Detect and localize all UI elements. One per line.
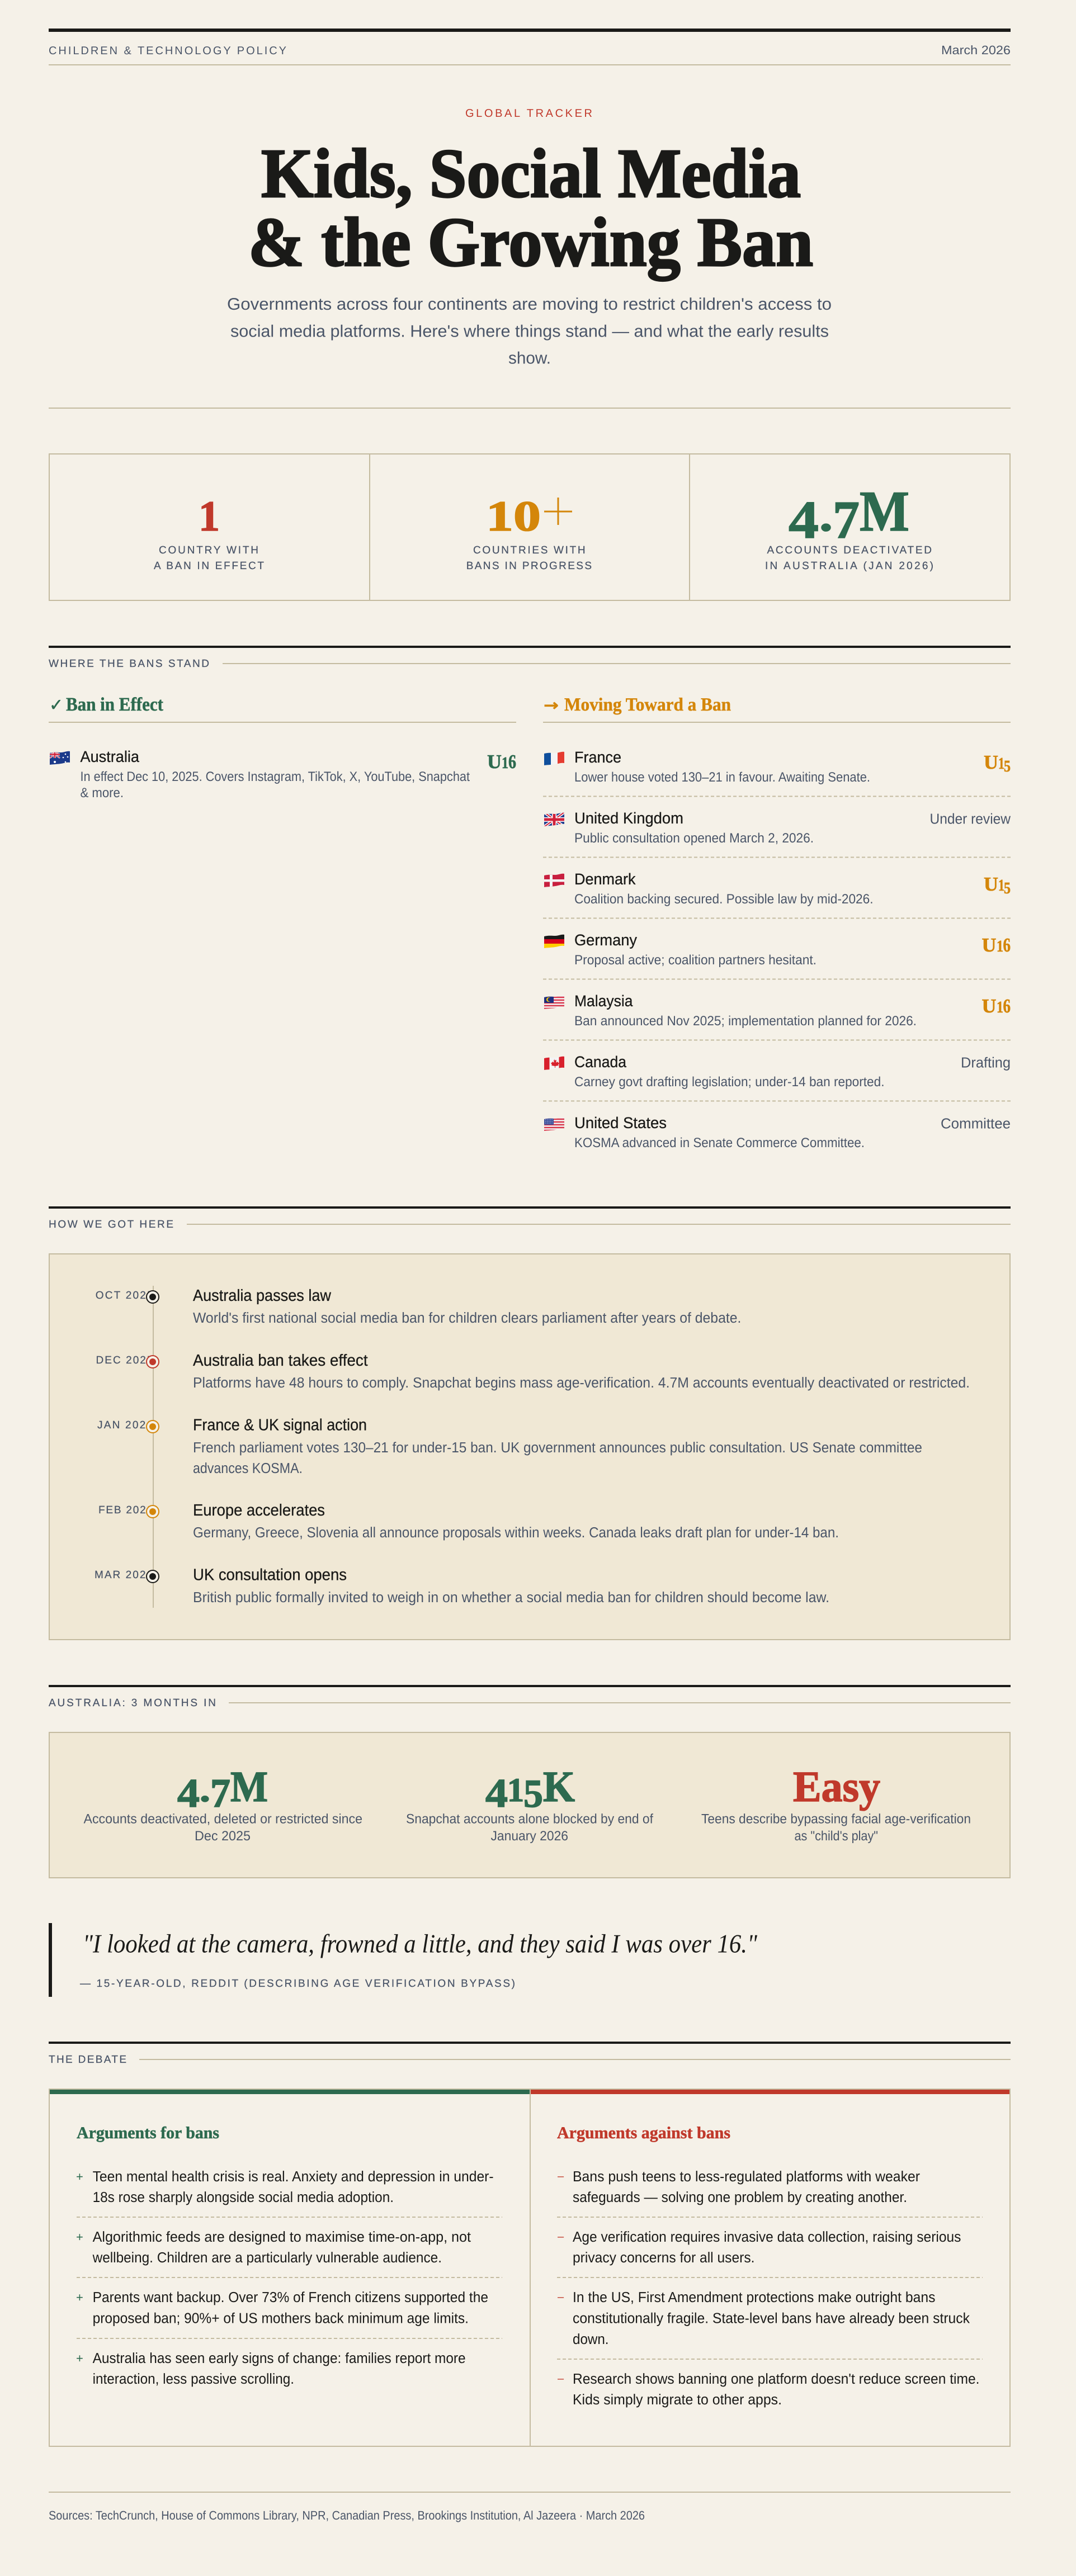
- argument 3: +: [76, 2290, 83, 2304]
- heading: arguments for: Arguments for bans: [77, 2124, 219, 2142]
- event: Oct 2025: World's first national social media ban for children clears parliament after years of debate.: [193, 1309, 741, 1326]
- column: arguments against bans: [531, 2090, 1009, 2408]
- row: France: [544, 751, 1010, 784]
- stat: 4.7M accounts: 4: [789, 490, 819, 550]
- event: Feb 2026: Germany, Greece, Slovenia all announce proposals within weeks. Canada leaks draft plan for under-14 ban.: [193, 1524, 839, 1541]
- row: United States: KOSMA advanced in Senate Commerce Committee.: [574, 1135, 865, 1150]
- title: Kids, Social Media: [261, 135, 801, 212]
- icon: Canada flag: [544, 1056, 564, 1071]
- row: Germany: 1: [997, 937, 1003, 955]
- row: Denmark: Denmark: [574, 870, 636, 888]
- event: Dec 2025: Platforms have 48 hours to comply. Snapchat begins mass age-verification. 4.7M accounts eventually deactivated or restricted.: [193, 1374, 970, 1391]
- footer sources: Sources: TechCrunch, House of Commons Library, NPR, Canadian Press, Brookings Institution, Al Jazeera · March 2026: [49, 2508, 645, 2522]
- stat: 4.7M: 4: [177, 1770, 200, 1816]
- row: Canada: Canada: [574, 1053, 626, 1071]
- stat: 4.7M accounts: ACCOUNTS DEACTIVATED: [767, 544, 932, 556]
- stat: 1 country: A BAN IN EFFECT: [154, 560, 264, 572]
- row: Denmark: [544, 870, 1011, 907]
- event: Mar 2026: MAR 2026: [95, 1569, 153, 1581]
- row: Denmark: Coalition backing secured. Possible law by mid-2026.: [574, 892, 874, 907]
- argument 3: [76, 2289, 488, 2327]
- stat: Easy: Easy: [793, 1762, 880, 1811]
- row: Germany: Germany: [574, 931, 637, 949]
- stat: 4.7M: 7: [210, 1770, 230, 1816]
- section heading: Australia 3 months in: AUSTRALIA: 3 MONTHS IN: [49, 1697, 216, 1709]
- stat: Easy: [701, 1762, 971, 1844]
- row: Germany: 6: [1003, 934, 1011, 956]
- row: Denmark: 1: [998, 877, 1004, 894]
- argument 2: Algorithmic feeds are designed to maximise time-on-app, not: [93, 2228, 471, 2245]
- argument 3: In the US, First Amendment protections make outright bans: [573, 2289, 935, 2305]
- panel: headline stats: [49, 454, 1010, 600]
- argument 2: –: [558, 2231, 564, 2243]
- event: Dec 2025: DEC 2025: [96, 1355, 153, 1366]
- argument 1: +: [76, 2170, 83, 2184]
- row: France: France: [574, 749, 621, 766]
- row: France: U: [984, 751, 998, 773]
- stat: 4.7M accounts: M: [860, 480, 909, 543]
- masthead label: CHILDREN & TECHNOLOGY POLICY: [49, 45, 286, 57]
- quote attribution: — 15-YEAR-OLD, REDDIT (DESCRIBING AGE VERIFICATION BYPASS): [80, 1978, 515, 1990]
- row: Australia: In effect Dec 10, 2025. Covers Instagram, TikTok, X, YouTube, Snapchat: [81, 769, 470, 784]
- row: Australia: 6: [508, 751, 516, 773]
- stat: 415K: 4: [485, 1770, 508, 1816]
- argument 4: interaction, less passive scrolling.: [93, 2370, 294, 2387]
- section heading: Australia 3 months in: [49, 1685, 1011, 1709]
- icon: UK flag: [544, 812, 564, 827]
- argument 4: Research shows banning one platform doesn't reduce screen time.: [573, 2370, 980, 2387]
- stat: 1 country: 1: [199, 492, 220, 540]
- event: Jan 2026: French parliament votes 130–21 for under-15 ban. UK government announces public consultation. US Senate committee: [193, 1439, 922, 1456]
- event: Mar 2026: British public formally invited to weigh in on whether a social media ban for children should become law.: [193, 1589, 829, 1606]
- argument 2: [76, 2228, 471, 2266]
- row: France: 5: [1004, 757, 1011, 775]
- pull quote: [49, 1923, 757, 1997]
- event: Dec 2025: Australia ban takes effect: [193, 1352, 368, 1370]
- stat: 415K: K: [543, 1762, 575, 1811]
- row: Malaysia: [544, 992, 1011, 1029]
- stat: 415K: [406, 1762, 653, 1844]
- row: Germany: [544, 931, 1011, 968]
- stat: 4.7M accounts: [765, 480, 933, 572]
- icon: Denmark flag: [544, 873, 564, 888]
- section heading: where the bans stand: WHERE THE BANS STAND: [49, 658, 209, 670]
- row: Malaysia: 6: [1003, 995, 1011, 1017]
- event: Mar 2026: [95, 1566, 829, 1606]
- argument 1: [76, 2168, 494, 2205]
- argument 3: constitutionally fragile. State-level bans have already been struck: [573, 2310, 970, 2327]
- row: United Kingdom: Under review: [929, 811, 1011, 827]
- argument 1: safeguards — solving one problem by creating another.: [573, 2189, 907, 2205]
- section heading: the debate: [49, 2042, 1011, 2066]
- argument 1: [558, 2168, 920, 2205]
- argument 3: –: [558, 2291, 564, 2303]
- row: Australia: U: [487, 751, 502, 773]
- row: United Kingdom: [544, 809, 1011, 846]
- event: Feb 2026: FEB 2026: [98, 1504, 153, 1516]
- hero header: [49, 107, 1011, 409]
- section heading: how we got here: HOW WE GOT HERE: [49, 1219, 173, 1230]
- argument 2: privacy concerns for all users.: [573, 2249, 755, 2266]
- row: Canada: Carney govt drafting legislation; under-14 ban reported.: [574, 1074, 885, 1090]
- masthead date: March 2026: [941, 43, 1011, 57]
- stat: 4.7M: M: [230, 1762, 268, 1811]
- column: arguments for bans: [50, 2090, 530, 2387]
- row: Germany: Proposal active; coalition partners hesitant.: [574, 953, 817, 968]
- row: Denmark: U: [984, 873, 998, 895]
- heading: arguments against: Arguments against bans: [557, 2124, 730, 2142]
- event: Jan 2026: JAN 2026: [97, 1419, 153, 1431]
- panel: Australia stats: [49, 1732, 1010, 1878]
- icon: France flag: [544, 751, 564, 766]
- stat: 1 country: [154, 492, 264, 572]
- argument 3: [558, 2289, 970, 2347]
- icon: Germany flag: [544, 934, 564, 949]
- event: Oct 2025: Australia passes law: [193, 1287, 332, 1305]
- argument 2: wellbeing. Children are a particularly vulnerable audience.: [92, 2249, 442, 2266]
- argument 2: +: [76, 2230, 83, 2244]
- row: Malaysia: Malaysia: [574, 992, 633, 1010]
- row: France: 1: [998, 755, 1004, 773]
- masthead: [49, 29, 1011, 65]
- stat: 415K: 5: [523, 1772, 543, 1816]
- row: Malaysia: 1: [997, 998, 1003, 1016]
- row: Denmark: 5: [1004, 879, 1011, 897]
- stat: 10+ countries: [466, 492, 592, 572]
- event: Feb 2026: Europe accelerates: [193, 1502, 325, 1519]
- stat: 1 country: COUNTRY WITH: [159, 544, 258, 556]
- event: Feb 2026: [98, 1502, 839, 1541]
- quote text: "I looked at the camera, frowned a little, and they said I was over 16.": [83, 1930, 757, 1959]
- argument 2: Age verification requires invasive data collection, raising serious: [573, 2228, 961, 2245]
- argument 4: Australia has seen early signs of change: families report more: [93, 2350, 466, 2366]
- subtitle: [227, 295, 832, 368]
- argument 4: [558, 2370, 980, 2408]
- event: Oct 2025: OCT 2025: [96, 1290, 153, 1301]
- argument 1: –: [558, 2170, 564, 2182]
- argument 4: –: [558, 2373, 564, 2385]
- eyebrow: GLOBAL TRACKER: [465, 107, 592, 120]
- argument 3: proposed ban; 90%+ of US mothers back minimum age limits.: [93, 2310, 469, 2327]
- row: Malaysia: Ban announced Nov 2025; implementation planned for 2026.: [574, 1014, 917, 1029]
- panel: timeline: [49, 1254, 1010, 1640]
- panel: debate: [49, 2089, 1010, 2446]
- icon: Malaysia flag: [544, 995, 564, 1010]
- argument 4: [76, 2350, 466, 2387]
- stat: Easy: as "child's play": [794, 1829, 878, 1844]
- argument 1: Bans push teens to less-regulated platforms with weaker: [573, 2168, 920, 2185]
- row: Australia: Australia: [81, 748, 139, 765]
- stat: 4.7M accounts: IN AUSTRALIA (JAN 2026): [765, 560, 933, 572]
- argument 4: +: [76, 2351, 83, 2365]
- stat: 4.7M: .: [200, 1771, 210, 1809]
- column heading: moving toward a ban: →: [544, 696, 559, 714]
- stat: Easy: Teens describe bypassing facial age-verification: [701, 1811, 971, 1827]
- row: United States: United States: [574, 1114, 667, 1131]
- argument 1: Teen mental health crisis is real. Anxiety and depression in under-: [93, 2168, 494, 2185]
- subtitle: show.: [508, 349, 551, 368]
- row: United States: Committee: [941, 1115, 1011, 1131]
- row: Malaysia: U: [982, 995, 997, 1017]
- row: Canada: [544, 1053, 1011, 1090]
- stat: 415K: January 2026: [491, 1829, 568, 1844]
- column heading: moving toward a ban: Moving Toward a Ban: [564, 695, 731, 715]
- event: Jan 2026: France & UK signal action: [193, 1417, 367, 1434]
- stat: 10+ countries: COUNTRIES WITH: [473, 544, 586, 556]
- stat: 10+ countries: 10: [486, 492, 541, 540]
- column heading: ban in effect: ✓: [49, 695, 63, 715]
- stat: 4.7M: Accounts deactivated, deleted or restricted since: [84, 1811, 362, 1827]
- event: Jan 2026: advances KOSMA.: [193, 1460, 303, 1476]
- row: United States: [544, 1117, 1010, 1147]
- event: Mar 2026: UK consultation opens: [193, 1566, 347, 1584]
- row: Germany: U: [982, 934, 997, 956]
- title: [248, 135, 813, 281]
- argument 1: 18s rose sharply alongside social media adoption.: [93, 2189, 394, 2205]
- event: Jan 2026: [97, 1417, 922, 1476]
- column heading: ban in effect: Ban in Effect: [66, 694, 164, 715]
- row: Australia: & more.: [81, 785, 124, 801]
- row: Australia: 1: [502, 754, 508, 772]
- argument 3: Parents want backup. Over 73% of French citizens supported the: [93, 2289, 488, 2305]
- event: Dec 2025: [96, 1352, 970, 1391]
- event: Oct 2025: [96, 1287, 741, 1326]
- icon: US flag: [544, 1117, 564, 1131]
- argument 4: Kids simply migrate to other apps.: [573, 2391, 782, 2408]
- section heading: where the bans stand: [49, 646, 1011, 670]
- argument 2: [558, 2228, 961, 2266]
- stat: 4.7M: [84, 1762, 362, 1844]
- stat: 10+ countries: BANS IN PROGRESS: [466, 560, 592, 572]
- row: Canada: Drafting: [961, 1054, 1011, 1071]
- title: & the Growing Ban: [248, 204, 813, 281]
- subtitle: social media platforms. Here's where things stand — and what the early results: [230, 322, 829, 341]
- panel: moving toward a ban: [543, 695, 1011, 1150]
- section heading: how we got here: [49, 1206, 1011, 1230]
- panel: ban in effect: [49, 694, 516, 801]
- stat: 4.7M accounts: .: [819, 491, 833, 541]
- stat: 4.7M: Dec 2025: [195, 1829, 251, 1844]
- row: Australia: [50, 750, 516, 797]
- icon: Australia flag: [50, 751, 70, 765]
- stat: 415K: 1: [507, 1772, 524, 1808]
- row: France: Lower house voted 130–21 in favour. Awaiting Senate.: [574, 770, 870, 785]
- argument 3: down.: [573, 2331, 608, 2347]
- stat: 4.7M accounts: 7: [833, 490, 860, 550]
- row: United Kingdom: Public consultation opened March 2, 2026.: [574, 831, 814, 846]
- section heading: the debate: THE DEBATE: [49, 2054, 126, 2066]
- subtitle: Governments across four continents are moving to restrict children's access to: [227, 295, 832, 314]
- stat: 415K: Snapchat accounts alone blocked by end of: [406, 1811, 653, 1827]
- row: United Kingdom: United Kingdom: [574, 809, 683, 827]
